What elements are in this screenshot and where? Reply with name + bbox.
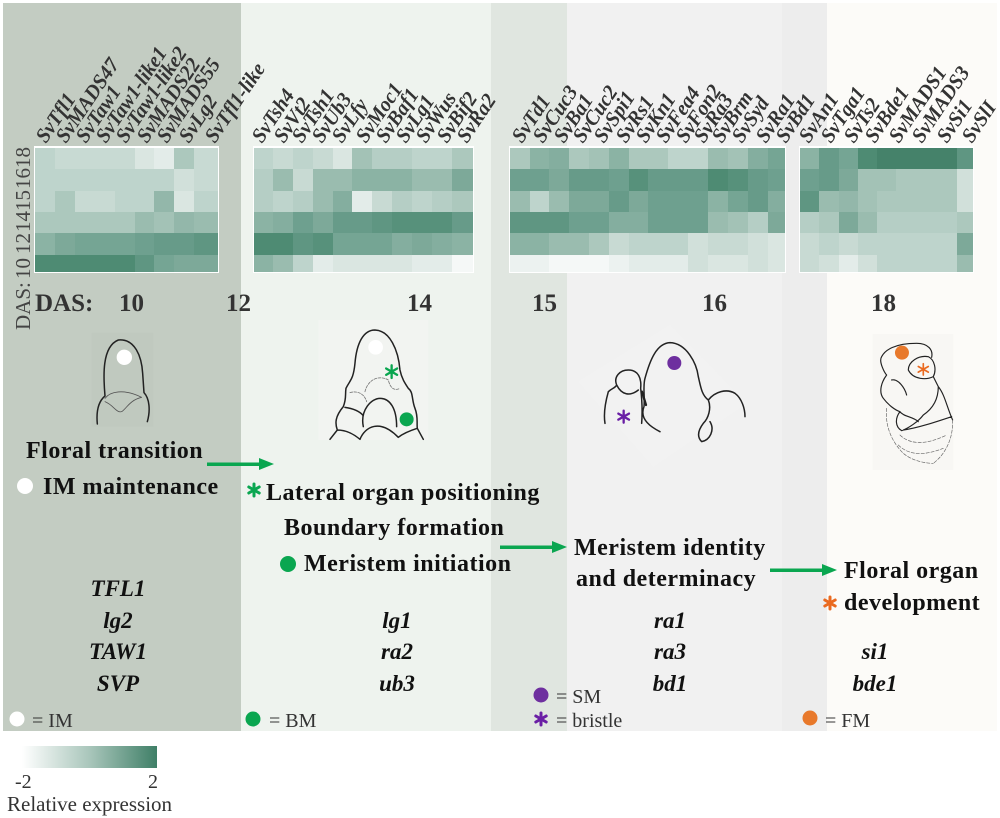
gene labels: group 3: SvSyd	[728, 92, 775, 147]
gene list: stage 1: SVP	[97, 671, 140, 696]
gene labels: group 3: SvTd1	[508, 91, 555, 147]
gene list: stage 2: ub3	[379, 671, 415, 696]
stage axis: days after sowing: 12	[226, 290, 251, 317]
gene labels: group 3: SvBd1	[772, 90, 820, 147]
axis label: DAS rows: 12	[11, 233, 35, 254]
gene labels: group 2: SvBif2	[433, 88, 482, 147]
arrow: to floral organ stage	[770, 564, 837, 576]
stage axis: days after sowing: 10	[119, 290, 144, 317]
text block: floral organ development: Floral organ	[844, 558, 979, 584]
color scale legend	[7, 746, 173, 816]
icon: purple SM dot	[667, 356, 681, 370]
gene labels: group 3: SvKn1	[632, 89, 681, 147]
gene list: stage 1: TFL1	[91, 576, 145, 601]
color scale legend: 2	[148, 771, 158, 793]
legend: BM	[246, 710, 317, 732]
gene list: stage 1: lg2	[103, 608, 133, 633]
gene labels: group 3: SvSpi1	[590, 87, 640, 147]
gene labels: group 1: SvTfl1	[32, 89, 81, 147]
micrograph: 14 DAS meristem	[318, 320, 428, 440]
gene labels: group 3: SvRa1	[752, 90, 800, 147]
text block: branch meristem processes: Boundary formation	[284, 515, 504, 541]
gene labels: group 4: SvMADS3	[908, 63, 975, 147]
stage axis: days after sowing: 14	[407, 290, 432, 317]
gene labels: group 3: SvBa1	[550, 90, 598, 147]
gene labels: group 2: SvLg1	[392, 91, 439, 147]
gene labels: group 2: SvUb3	[308, 89, 357, 147]
gene labels: group 3: SvFea4	[652, 83, 705, 147]
text block: floral organ development	[825, 558, 980, 616]
stage axis: days after sowing	[35, 290, 896, 317]
icon: purple asterisk	[618, 411, 629, 423]
gene labels: group 4: SvTs2	[840, 94, 885, 147]
gene labels: group 2: SvTsh1	[288, 85, 339, 147]
gene labels: group 4: SvBde1	[861, 83, 914, 147]
gene labels: group 3: SvCuc2	[569, 82, 623, 147]
gene labels: group 1: SvMADS22	[133, 54, 205, 147]
legend: FM: = FM	[825, 710, 870, 732]
gene labels: group 3	[508, 81, 820, 147]
text block: branch meristem processes: Lateral organ positioning	[266, 480, 540, 506]
gene labels: group 2: SvLfy	[328, 94, 373, 147]
gene list: stage 4	[853, 639, 897, 696]
gene labels: group 1: SvTaw1-like1	[92, 43, 172, 147]
gene labels: group 1: SvMADS47	[52, 54, 125, 147]
heatmap panel: branch meristem genes	[248, 79, 501, 273]
gene list: stage 1	[89, 576, 147, 696]
gene labels: group 1: SvTaw1-like2	[112, 43, 192, 147]
icon: green dot	[280, 556, 296, 572]
legend: FM	[802, 710, 870, 732]
axis label: DAS rows	[11, 147, 35, 330]
text block: branch meristem processes: Meristem initiation	[304, 551, 511, 577]
icon: orange FM dot	[895, 346, 909, 360]
heatmap panel: spikelet meristem genes	[508, 81, 820, 273]
gene list: stage 2: ra2	[381, 639, 413, 664]
heatmap frame: white edge	[799, 146, 974, 273]
gene labels: group 3: SvBrm	[708, 87, 758, 147]
axis label: DAS rows: 15	[11, 190, 35, 211]
gene labels: group 4: SvTga1	[817, 83, 870, 147]
legend: BM: = BM	[269, 710, 317, 732]
heatmap frame: white edge	[509, 146, 786, 273]
gene labels: group 2: SvBaf1	[372, 85, 424, 147]
gene list: stage 1: TAW1	[89, 639, 147, 664]
gene labels: group 2: SvMoc1	[352, 79, 407, 147]
gene list: stage 3: ra3	[654, 639, 686, 664]
icon: green asterisk	[386, 365, 397, 378]
axis label: DAS rows: DAS:	[11, 282, 35, 330]
heatmap frame: white edge	[253, 146, 474, 273]
text block: floral transition: IM maintenance	[43, 474, 219, 500]
heatmap panel: floral meristem genes	[795, 63, 1000, 273]
stage axis: days after sowing: 16	[702, 290, 727, 317]
text block: floral transition: Floral transition	[26, 438, 203, 464]
icon: orange asterisk	[825, 597, 835, 609]
gene labels: group 3: SvCuc3	[529, 82, 583, 147]
axis label: DAS rows: 10	[11, 258, 35, 279]
legend: SM	[534, 686, 601, 708]
gene labels: group 4: SvAn1	[795, 89, 844, 147]
gene labels: group 4: SvSi1	[933, 96, 977, 147]
gene list: stage 2	[379, 608, 415, 696]
gene labels: group 3: SvRa3	[690, 90, 738, 147]
legend: bristle: = bristle	[556, 710, 622, 732]
gene labels: group 4: SvMADS1	[885, 63, 952, 147]
heatmap 1	[35, 148, 218, 272]
color scale legend: -2	[15, 771, 32, 793]
gene list: stage 3	[653, 608, 687, 696]
text block: meristem identity: and determinacy	[576, 566, 756, 592]
heatmap 3	[510, 148, 785, 272]
gene labels: group 1: SvLg2	[175, 91, 222, 147]
gene labels: group 1: SvTfl1-like	[201, 59, 270, 147]
gene labels: group 1: SvMADS55	[153, 54, 225, 147]
gene labels: group 4: SvSlI	[958, 97, 1000, 147]
arrow: to meristem identity stage	[500, 541, 567, 553]
gene labels: group 2: SvWus	[412, 88, 461, 147]
gene labels: group 2: SvVt2	[270, 94, 316, 147]
gene labels: group 3: SvRs1	[612, 92, 659, 147]
stage axis: days after sowing: 18	[871, 290, 896, 317]
stage axis: days after sowing: 15	[532, 290, 557, 317]
gene list: stage 2: lg1	[382, 608, 412, 633]
micrograph: 10 DAS meristem	[92, 333, 153, 427]
gene list: stage 3: bd1	[653, 671, 687, 696]
icon: white IM dot	[368, 340, 383, 355]
heatmap frame: white edge	[34, 146, 219, 273]
heatmap 4	[800, 148, 973, 272]
icon: white dot	[17, 478, 33, 494]
text block: floral transition	[17, 438, 219, 500]
micrograph: 16 DAS meristem	[578, 325, 747, 467]
text block: floral organ development: development	[844, 590, 980, 616]
icon: green asterisk	[249, 484, 259, 496]
heatmap panel: inflorescence meristem genes	[32, 43, 270, 273]
gene labels: group 2: SvRa2	[453, 90, 501, 147]
icon: orange asterisk	[918, 364, 928, 375]
micrograph: 18 DAS floret	[873, 334, 953, 470]
legend: IM	[10, 710, 73, 732]
axis label: DAS rows: 14	[11, 210, 35, 232]
arrow: transition to lateral organ stage	[207, 458, 274, 470]
text block: meristem identity: Meristem identity	[574, 535, 766, 561]
legend: IM: = IM	[32, 710, 73, 732]
text block: branch meristem processes	[249, 480, 540, 577]
color scale legend: Relative expression	[7, 792, 173, 816]
gene labels: group 1: SvTaw1	[72, 82, 126, 147]
gene list: stage 4: bde1	[853, 671, 897, 696]
gene labels: group 3: SvFon2	[672, 81, 726, 147]
icon: green BM dot	[400, 412, 414, 426]
gene labels: group 4	[795, 63, 1000, 147]
icon: white IM dot	[117, 350, 132, 365]
gene list: stage 4: si1	[861, 639, 888, 664]
axis label: DAS rows: 16	[11, 168, 35, 189]
gene labels: group 2	[248, 79, 501, 147]
heatmap 2	[254, 148, 473, 272]
axis label: DAS rows: 18	[11, 147, 35, 168]
legend: SM: = SM	[556, 686, 601, 708]
text block: meristem identity	[574, 535, 766, 592]
gene labels: group 2: SvTsh4	[248, 85, 299, 147]
stage axis: days after sowing: DAS:	[35, 290, 93, 317]
gene list: stage 3: ra1	[654, 608, 686, 633]
gene labels: group 1	[32, 43, 270, 147]
